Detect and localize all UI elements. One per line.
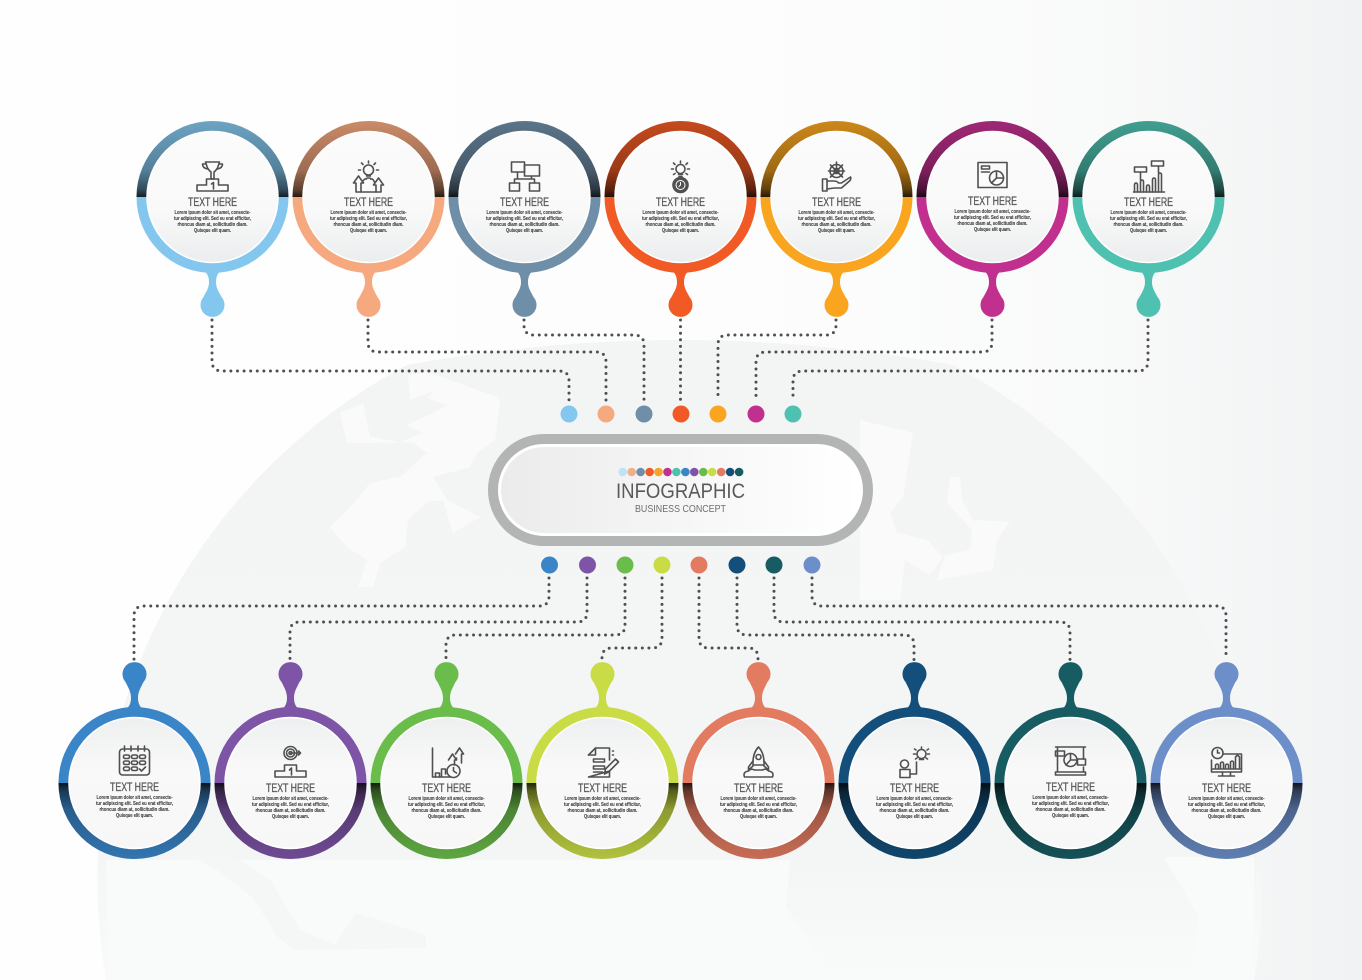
body text bbox=[720, 796, 797, 820]
bottom item 8: periwinkle bbox=[1150, 662, 1302, 859]
body text: tur adipiscing elit. Sed eu erat efficitur, bbox=[330, 216, 407, 222]
body text: Lorem ipsum dolor sit amet, consecte- bbox=[1032, 795, 1109, 801]
heading: TEXT HERE bbox=[812, 195, 861, 209]
body text: rhoncus diam at, sollicitudin diam. bbox=[646, 222, 716, 228]
body text: Lorem ipsum dolor sit amet, consecte- bbox=[564, 796, 641, 802]
bottom item 6: navy bbox=[838, 662, 990, 859]
top connector dots bbox=[560, 406, 802, 422]
body text: Lorem ipsum dolor sit amet, consecte- bbox=[174, 210, 251, 216]
body text: Lorem ipsum dolor sit amet, consecte- bbox=[486, 210, 563, 216]
dotted connectors: bottom row bbox=[134, 578, 1226, 662]
heading: TEXT HERE bbox=[734, 781, 783, 795]
icon: document and pencil bbox=[588, 748, 618, 777]
body text: rhoncus diam at, sollicitudin diam. bbox=[412, 808, 482, 814]
heading: TEXT HERE bbox=[266, 781, 315, 795]
body text bbox=[1188, 796, 1265, 820]
top item 1: light blue bbox=[136, 121, 288, 317]
body text bbox=[1032, 795, 1109, 819]
body text bbox=[876, 796, 953, 820]
body text: Quisque elit quam. bbox=[506, 228, 543, 234]
icon: presentation board with pie bbox=[1056, 747, 1086, 775]
body text bbox=[96, 795, 173, 819]
icon: person and bulb bbox=[900, 747, 930, 778]
body text: Quisque elit quam. bbox=[272, 814, 309, 820]
heading: TEXT HERE bbox=[422, 781, 471, 795]
body text: tur adipiscing elit. Sed eu erat efficitur, bbox=[408, 802, 485, 808]
body text: tur adipiscing elit. Sed eu erat efficitur, bbox=[720, 802, 797, 808]
body text: Lorem ipsum dolor sit amet, consecte- bbox=[642, 210, 719, 216]
body text: Lorem ipsum dolor sit amet, consecte- bbox=[1188, 796, 1265, 802]
body text: tur adipiscing elit. Sed eu erat efficitur, bbox=[564, 802, 641, 808]
body text: rhoncus diam at, sollicitudin diam. bbox=[802, 222, 872, 228]
body text: tur adipiscing elit. Sed eu erat efficitur, bbox=[96, 801, 173, 807]
subtitle text: BUSINESS CONCEPT bbox=[635, 503, 726, 515]
body text: tur adipiscing elit. Sed eu erat efficitur, bbox=[1032, 801, 1109, 807]
body text: Lorem ipsum dolor sit amet, consecte- bbox=[252, 796, 329, 802]
body text: tur adipiscing elit. Sed eu erat efficitur, bbox=[174, 216, 251, 222]
heading: TEXT HERE bbox=[1124, 195, 1173, 209]
body text: Lorem ipsum dolor sit amet, consecte- bbox=[408, 796, 485, 802]
body text: rhoncus diam at, sollicitudin diam. bbox=[256, 808, 326, 814]
icon: rocket and cloud bbox=[744, 747, 773, 777]
body text: Quisque elit quam. bbox=[740, 814, 777, 820]
body text: tur adipiscing elit. Sed eu erat efficitur, bbox=[486, 216, 563, 222]
top item 4: orange red bbox=[604, 121, 756, 317]
body text: Quisque elit quam. bbox=[896, 814, 933, 820]
bottom item 2: purple bbox=[214, 662, 366, 859]
top item 3: slate bbox=[448, 121, 600, 317]
body text: Quisque elit quam. bbox=[1130, 228, 1167, 234]
body text: tur adipiscing elit. Sed eu erat efficitur, bbox=[876, 802, 953, 808]
body text: rhoncus diam at, sollicitudin diam. bbox=[100, 807, 170, 813]
bottom item 5: coral bbox=[682, 662, 834, 859]
body text: Quisque elit quam. bbox=[662, 228, 699, 234]
body text: Quisque elit quam. bbox=[974, 227, 1011, 233]
body text: Quisque elit quam. bbox=[818, 228, 855, 234]
body text: rhoncus diam at, sollicitudin diam. bbox=[490, 222, 560, 228]
heading: TEXT HERE bbox=[500, 195, 549, 209]
body text bbox=[252, 796, 329, 820]
title text: INFOGRAPHIC bbox=[616, 480, 745, 503]
bottom item 7: dark teal bbox=[994, 662, 1146, 859]
icon: ship wheel on hand bbox=[822, 162, 851, 191]
heading: TEXT HERE bbox=[344, 195, 393, 209]
icon: presentation pie bbox=[978, 162, 1007, 188]
heading: TEXT HERE bbox=[1046, 780, 1095, 794]
icon: monitor chart and clock bbox=[1212, 748, 1242, 776]
heading: TEXT HERE bbox=[656, 195, 705, 209]
top item 7: teal bbox=[1072, 121, 1224, 317]
body text: tur adipiscing elit. Sed eu erat efficitur, bbox=[1110, 216, 1187, 222]
bottom item 3: green bbox=[370, 662, 522, 859]
body text bbox=[954, 209, 1031, 233]
body text: tur adipiscing elit. Sed eu erat efficitur, bbox=[642, 216, 719, 222]
body text: Quisque elit quam. bbox=[584, 814, 621, 820]
colour dots row bbox=[618, 468, 743, 476]
body text bbox=[174, 210, 251, 234]
body text bbox=[486, 210, 563, 234]
icon: trophy on podium bbox=[197, 162, 228, 191]
body text: Lorem ipsum dolor sit amet, consecte- bbox=[96, 795, 173, 801]
body text: rhoncus diam at, sollicitudin diam. bbox=[1114, 222, 1184, 228]
top item 6: magenta bbox=[916, 121, 1068, 317]
body text: rhoncus diam at, sollicitudin diam. bbox=[724, 808, 794, 814]
icon: target on podium bbox=[275, 746, 306, 777]
body text: tur adipiscing elit. Sed eu erat efficitur, bbox=[1188, 802, 1265, 808]
bottom connector dots bbox=[541, 556, 820, 574]
body text: Quisque elit quam. bbox=[1208, 814, 1245, 820]
body text: rhoncus diam at, sollicitudin diam. bbox=[958, 221, 1028, 227]
body text: Lorem ipsum dolor sit amet, consecte- bbox=[1110, 210, 1187, 216]
body text: Quisque elit quam. bbox=[1052, 813, 1089, 819]
body text: Lorem ipsum dolor sit amet, consecte- bbox=[876, 796, 953, 802]
body text: Lorem ipsum dolor sit amet, consecte- bbox=[330, 210, 407, 216]
body text: rhoncus diam at, sollicitudin diam. bbox=[334, 222, 404, 228]
body text bbox=[1110, 210, 1187, 234]
body text bbox=[798, 210, 875, 234]
body text bbox=[642, 210, 719, 234]
body text: tur adipiscing elit. Sed eu erat efficitur, bbox=[252, 802, 329, 808]
heading: TEXT HERE bbox=[890, 781, 939, 795]
body text: Lorem ipsum dolor sit amet, consecte- bbox=[720, 796, 797, 802]
body text bbox=[408, 796, 485, 820]
heading: TEXT HERE bbox=[188, 195, 237, 209]
body text: rhoncus diam at, sollicitudin diam. bbox=[880, 808, 950, 814]
body text: Lorem ipsum dolor sit amet, consecte- bbox=[954, 209, 1031, 215]
body text: tur adipiscing elit. Sed eu erat efficitur, bbox=[798, 216, 875, 222]
body text: Quisque elit quam. bbox=[194, 228, 231, 234]
body text: rhoncus diam at, sollicitudin diam. bbox=[178, 222, 248, 228]
central pill: infographic title bbox=[493, 439, 868, 541]
bottom item 4: lime bbox=[526, 662, 678, 859]
top item 2: peach bbox=[292, 121, 444, 317]
body text bbox=[330, 210, 407, 234]
top item 5: amber bbox=[760, 121, 912, 317]
body text: rhoncus diam at, sollicitudin diam. bbox=[568, 808, 638, 814]
bottom item 1: blue bbox=[58, 662, 210, 859]
body text: Quisque elit quam. bbox=[116, 813, 153, 819]
icon: flowchart bbox=[510, 162, 540, 191]
icon: growth chart and clock bbox=[432, 748, 464, 778]
icon: bulb and arrows bbox=[354, 161, 384, 192]
icon: calendar bbox=[120, 746, 150, 775]
body text: Quisque elit quam. bbox=[428, 814, 465, 820]
world globe bbox=[97, 340, 1263, 980]
body text: tur adipiscing elit. Sed eu erat efficitur, bbox=[954, 215, 1031, 221]
body text: rhoncus diam at, sollicitudin diam. bbox=[1192, 808, 1262, 814]
heading: TEXT HERE bbox=[1202, 781, 1251, 795]
heading: TEXT HERE bbox=[578, 781, 627, 795]
heading: TEXT HERE bbox=[968, 194, 1017, 208]
icon: bulb and clock bbox=[672, 161, 690, 192]
body text: rhoncus diam at, sollicitudin diam. bbox=[1036, 807, 1106, 813]
dotted connectors: top row bbox=[212, 320, 1148, 400]
icon: bar chart with flags bbox=[1134, 161, 1164, 192]
body text: Lorem ipsum dolor sit amet, consecte- bbox=[798, 210, 875, 216]
heading: TEXT HERE bbox=[110, 780, 159, 794]
body text: Quisque elit quam. bbox=[350, 228, 387, 234]
body text bbox=[564, 796, 641, 820]
